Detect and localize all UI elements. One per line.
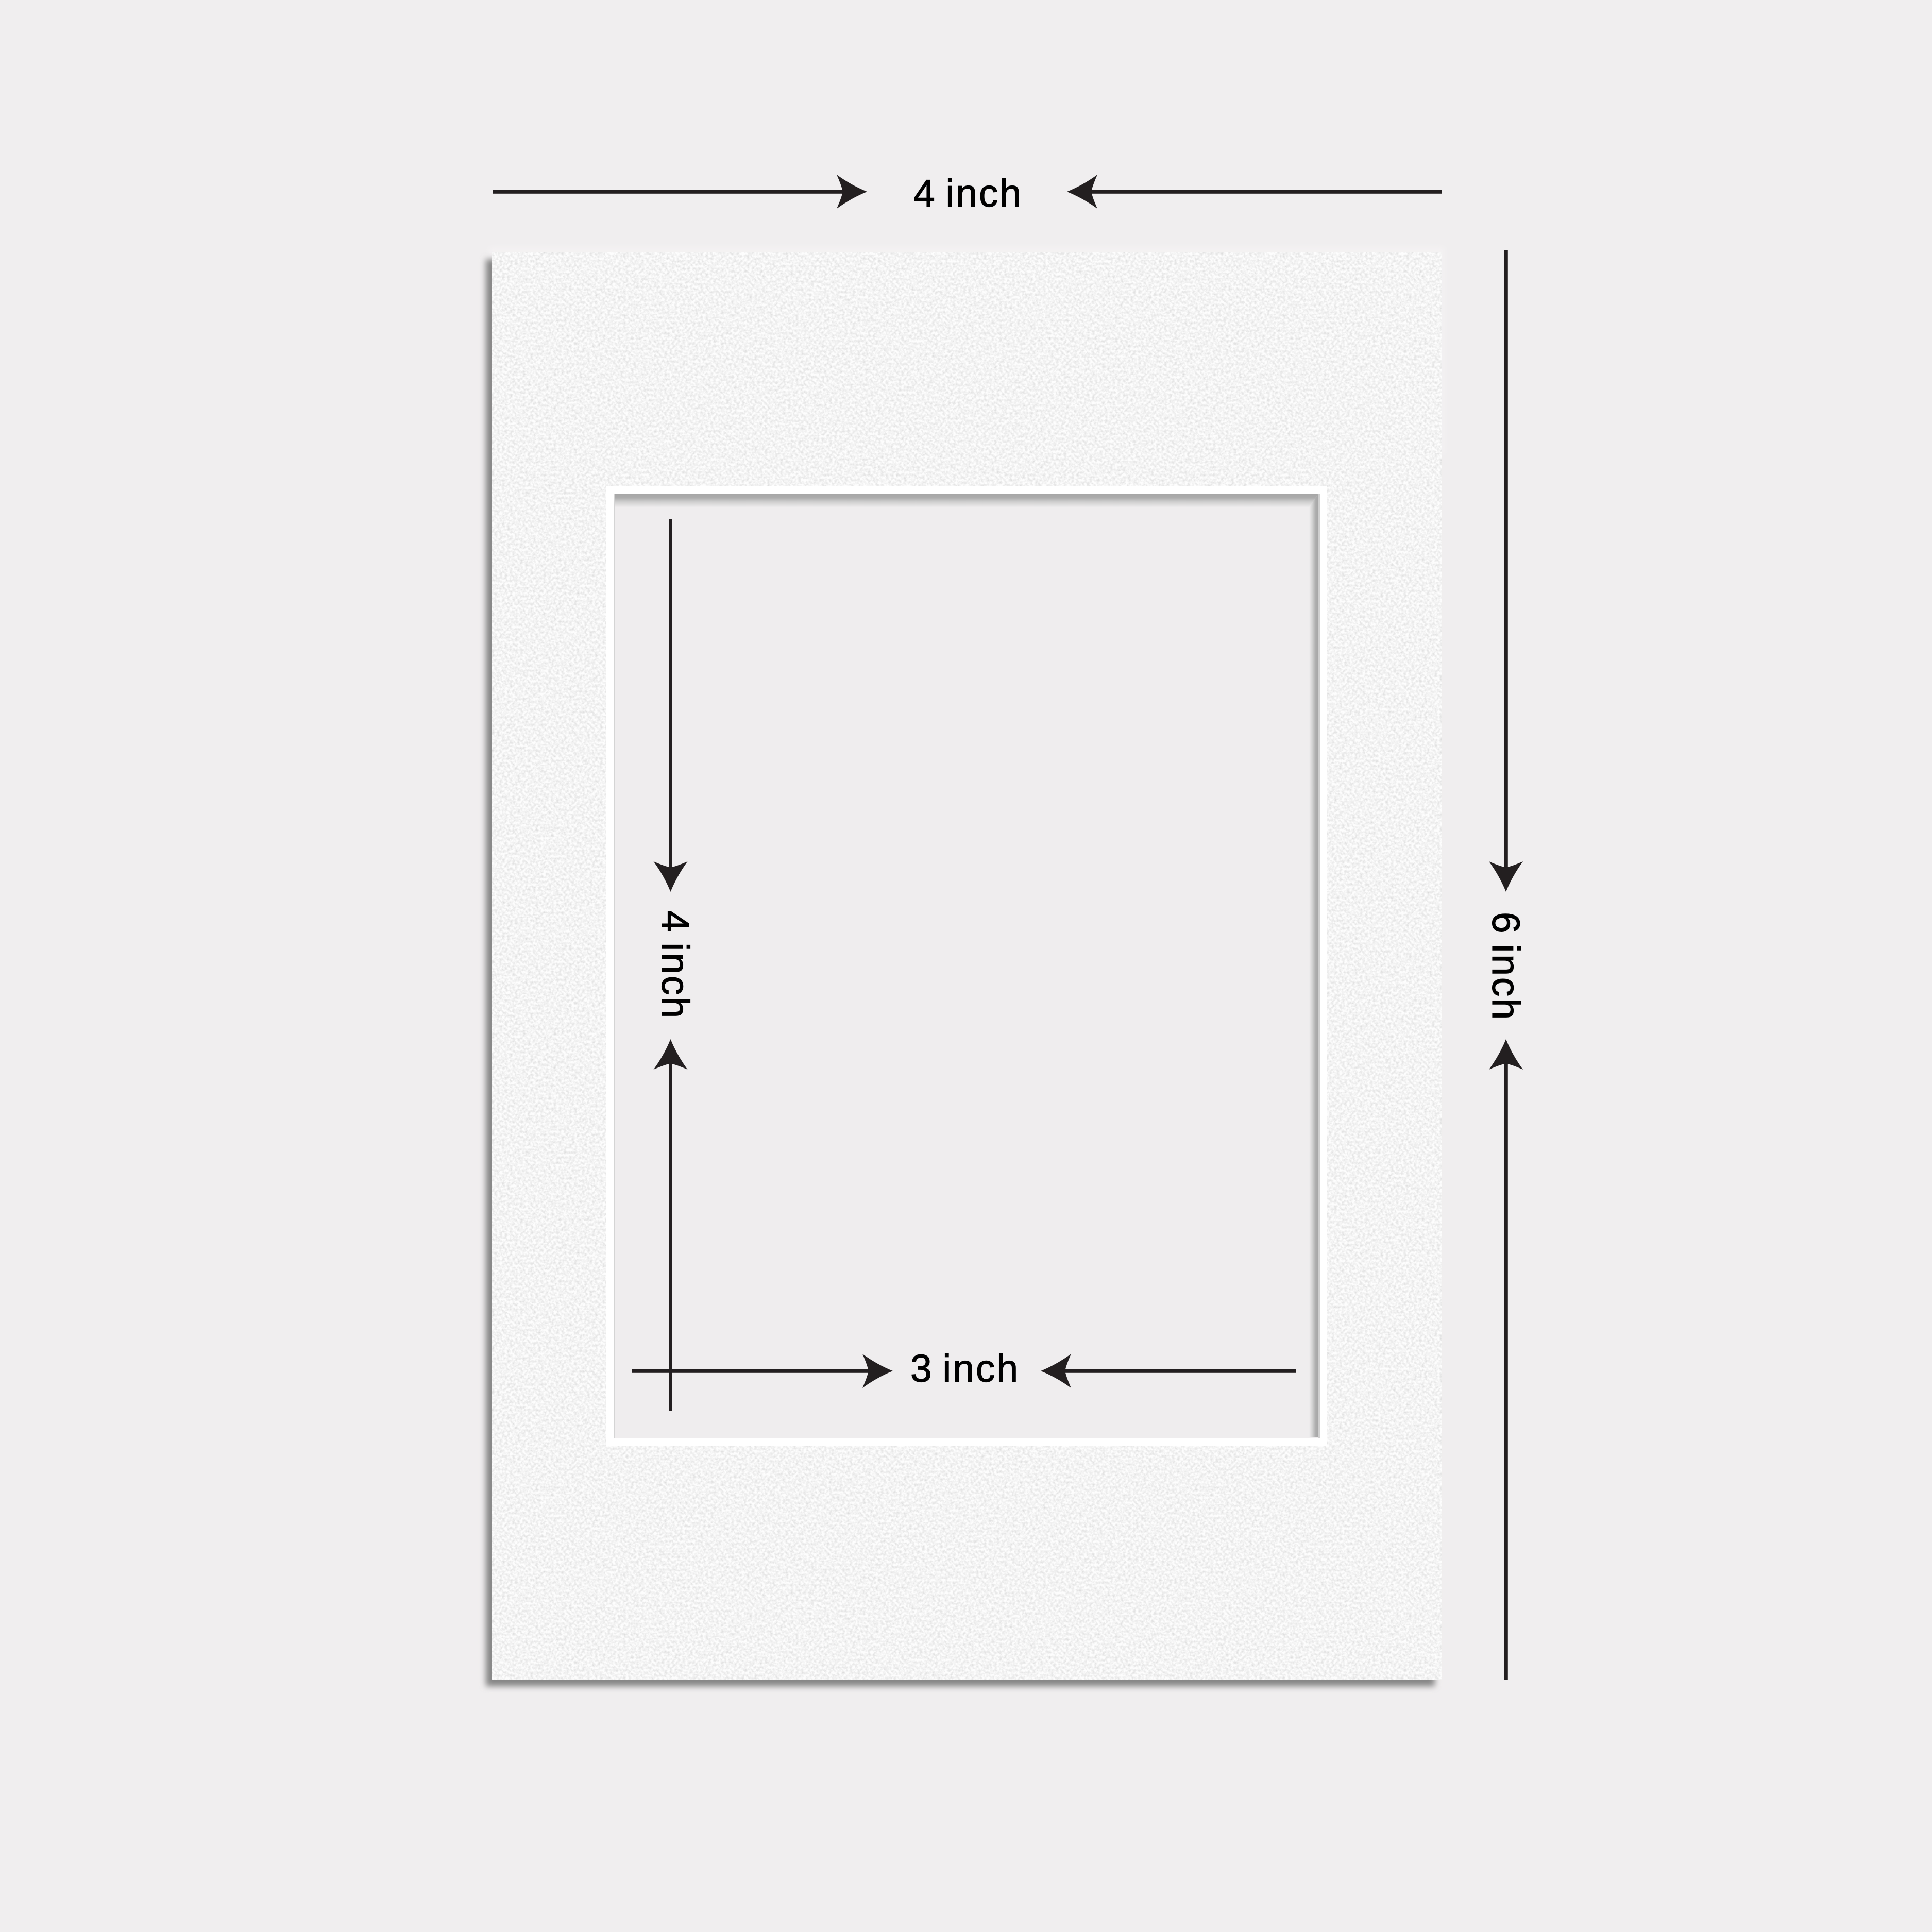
mat paper grain	[492, 252, 1442, 1680]
arrow: top width, left segment	[493, 175, 867, 209]
opening left edge line	[614, 494, 615, 1438]
arrow: opening height, lower segment	[653, 1039, 687, 1411]
arrow: opening height, upper segment	[653, 519, 687, 892]
panel: photo mat board	[486, 247, 1444, 1686]
arrow: opening width, right segment	[1041, 1354, 1296, 1388]
arrow: top width, right segment	[1067, 175, 1442, 209]
mat halo	[489, 247, 1444, 453]
arrow: overall height, lower segment	[1489, 1039, 1523, 1680]
label: opening width 3 inch: 3 inch	[910, 1347, 1020, 1390]
mat drop shadow	[486, 259, 1435, 1686]
arrow: overall height, upper segment	[1489, 250, 1523, 892]
label: overall height 6 inch: 6 inch	[1484, 912, 1528, 1021]
arrow: opening width, left segment	[632, 1354, 893, 1388]
label: opening height 4 inch: 4 inch	[654, 910, 697, 1020]
label: top width 4 inch: 4 inch	[913, 172, 1023, 215]
opening top inner shadow	[615, 494, 1318, 507]
opening right edge strip	[1318, 494, 1320, 1438]
window white bevel	[606, 486, 1327, 1446]
mat surface	[492, 252, 1442, 1680]
window opening	[615, 494, 1320, 1438]
opening right inner shadow	[1309, 494, 1318, 1437]
